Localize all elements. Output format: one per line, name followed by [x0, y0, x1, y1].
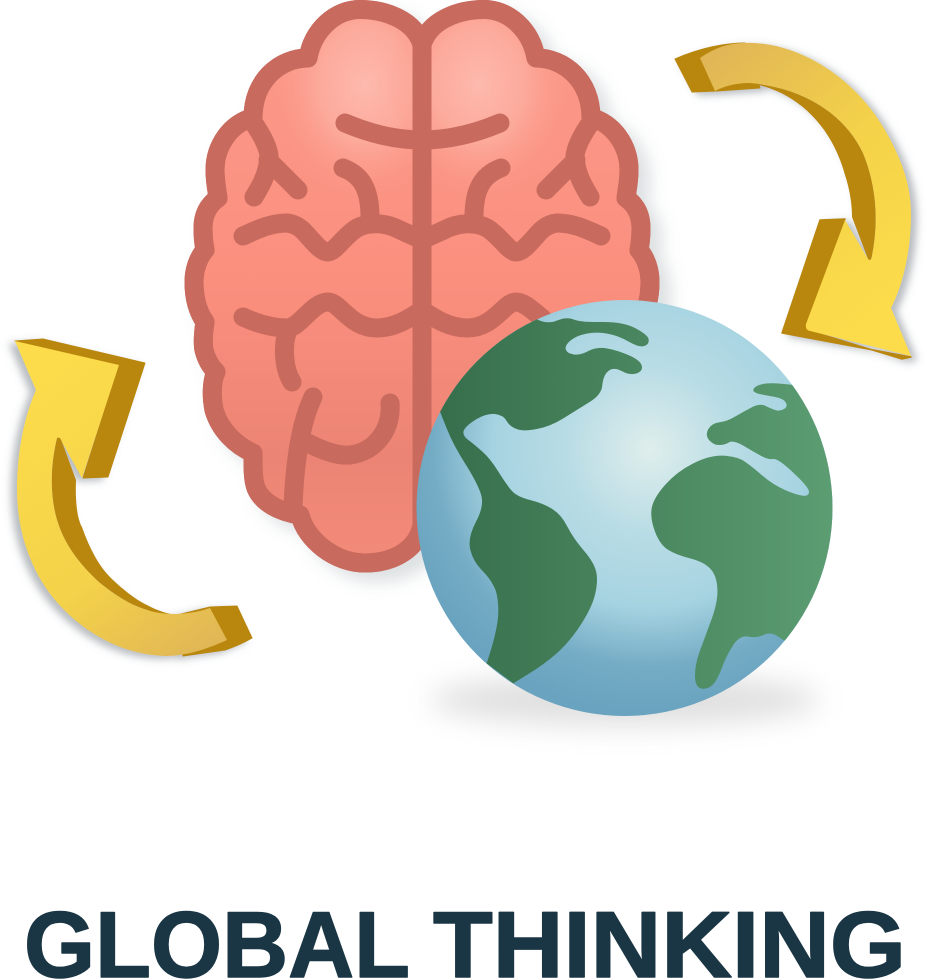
arrow inner band	[747, 83, 876, 260]
icon: brain	[194, 0, 650, 563]
land: left continent	[440, 318, 649, 684]
globe shadow	[430, 674, 820, 726]
icon: upper right arrow	[675, 43, 911, 359]
brain outline and folds	[194, 10, 650, 563]
brain highlights	[300, 19, 544, 168]
arrow head side	[782, 219, 911, 359]
icon: globe	[416, 300, 832, 716]
brain lobes fill	[194, 10, 650, 563]
title	[24, 892, 906, 980]
arrow tail end	[675, 43, 760, 92]
land masses	[440, 318, 832, 689]
arrow head side	[15, 339, 145, 478]
ocean	[416, 300, 832, 716]
arrow face	[15, 341, 227, 656]
arrow face	[700, 43, 911, 356]
land: right continent	[651, 383, 832, 689]
icon: lower left arrow	[15, 339, 252, 656]
arrow tail end	[177, 606, 252, 656]
arrow inner band	[52, 438, 177, 615]
